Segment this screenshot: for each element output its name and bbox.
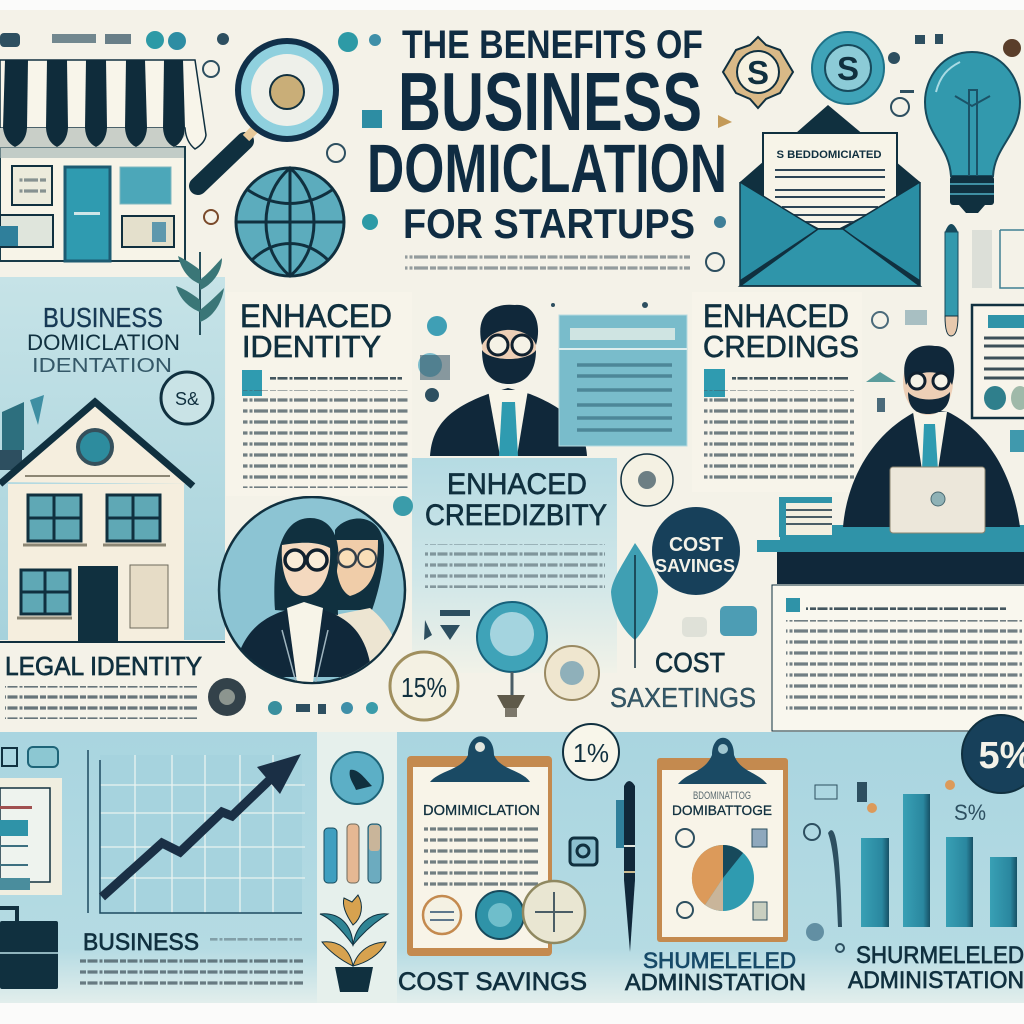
text block: business domiciliation: DOMICLATION [27,330,180,355]
icon: small gadget [570,838,597,865]
panel: enhanced credings: CREDINGS [703,329,859,364]
title: BUSINESS [398,55,702,148]
icon: fountain pen [616,781,635,952]
panel: right text card [772,585,1024,731]
panel: pale strip in bottom band [317,732,397,1003]
icon: envelope with letter: S BEDDOMICIATED [776,149,882,161]
title: THE BENEFITS OF [402,23,703,67]
text block: legal identity: LEGAL IDENTITY [5,651,202,681]
icon: pen [945,224,958,336]
text block: business domiciliation: BUSINESS [43,302,163,333]
panel: enhanced identity: ENHACED [240,298,392,334]
icon: printer sketch [972,230,1024,288]
icon: house [0,402,225,642]
illustration: two women [219,497,405,690]
illustration: man in suit [430,305,587,456]
text block: simplified administration right [848,942,1024,994]
panel: enhanced credibility background [412,458,617,673]
text block: simplified administration left: ADMINISTATION [625,969,806,995]
icon: envelope with letter [740,105,920,286]
badge: 1 percent [563,724,619,780]
icon: light bulb coin [477,602,547,717]
panel: blue left column [0,277,225,640]
icon: teal leaf [611,543,658,668]
badge: 15 percent [390,652,458,720]
text block: enhanced credibility: ENHACED [447,468,587,501]
panel: clipboard domiciliation [407,736,585,956]
panel: clipboard domiciliation: DOMIMICLATION [423,802,540,819]
badge: cost savings [651,506,741,596]
decorative plant [176,252,224,335]
text block: cost savetings: SAXETINGS [610,682,756,713]
panel: clipboard with pie: BDOMINATTOG [693,790,751,802]
icon: bar chart [861,794,1017,927]
badge: 1 percent: 1% [573,738,609,768]
text block: enhanced credibility [425,468,607,588]
illustration: man at laptop [757,345,1024,584]
badge: 5 percent [962,715,1024,793]
icon: small coin left [161,372,213,424]
text block: cost savetings [610,647,756,713]
badge: cost savings: COST [669,534,723,556]
icon: stack of papers [779,497,832,537]
icon: storefront [0,60,206,261]
icon: globe [236,168,344,276]
icon: light bulb [925,52,1020,213]
icon: coin gears [723,32,884,108]
line chart with rising arrow [88,750,305,913]
text block: enhanced credibility: CREEDIZBITY [425,499,607,532]
panel: blue bottom band [0,732,1024,1003]
badge: 15 percent: 15% [401,672,447,703]
icon: coin gears: S [747,54,769,91]
icon: potted plant [320,895,388,992]
panel: enhanced credings [692,292,862,492]
text block: legal identity [5,651,202,719]
small icon: gear dark [208,678,246,716]
text block: business [78,929,303,990]
icon: magnifying glass [198,41,336,186]
icon: small coin left: S& [175,389,199,409]
icon: document right with chart [972,305,1024,418]
title [367,23,727,274]
text block: business domiciliation: IDENTATION [32,355,172,377]
text block: business: BUSINESS [83,929,199,956]
panel: enhanced credings: ENHACED [703,298,849,334]
text block: simplified administration left: SHUMELELED [643,948,796,973]
panel: enhanced identity: IDENTITY [242,329,381,364]
icon: briefcase [0,908,58,989]
icon: coin gears: S [837,50,859,87]
title: DOMICLATION [367,130,727,207]
panel: enhanced identity [226,292,412,496]
icon: small coin centre [621,454,673,506]
text block: simplified administration left [625,948,806,995]
text block: business domiciliation [27,302,180,377]
badge: cost savings: SAVINGS [655,556,735,576]
icon: beige coin [545,646,599,700]
icon: clipboard left of chart [0,747,62,895]
title: FOR STARTUPS [403,200,695,247]
icon: mini bars and pie [324,752,383,883]
text block: cost savings bottom: COST SAVINGS [398,968,587,996]
text block: cost savetings: COST [655,647,725,678]
icon: bar chart: S% [954,800,986,825]
panel: document screen [559,315,687,446]
panel: clipboard with pie: DOMIBATTOGE [672,802,772,818]
panel: clipboard with pie [657,738,788,942]
